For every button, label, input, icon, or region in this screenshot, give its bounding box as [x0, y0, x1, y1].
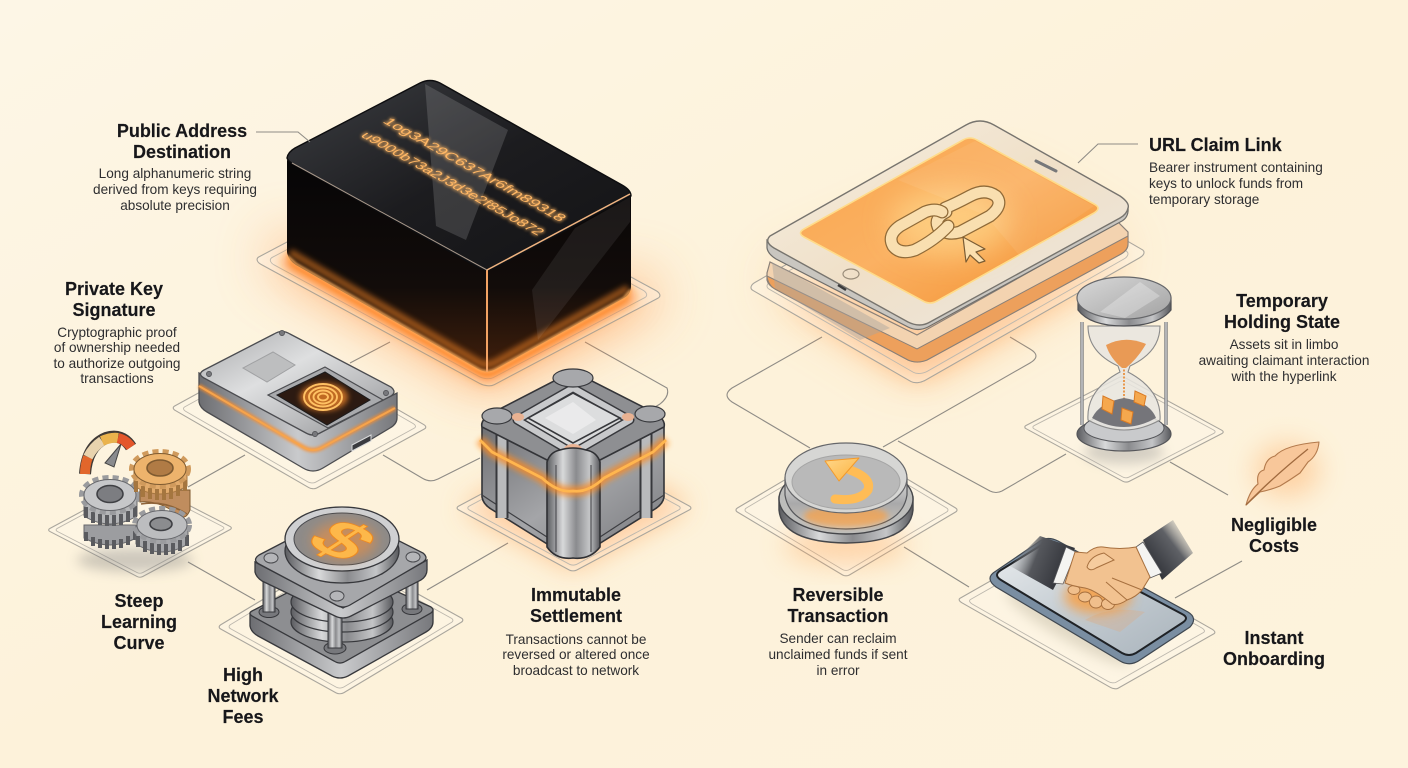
side straps	[502, 430, 646, 518]
description: Sender can reclaim	[779, 631, 897, 646]
platform	[734, 443, 959, 577]
panel: high network fees	[207, 507, 465, 727]
description: to authorize outgoing	[54, 356, 180, 371]
side faces	[482, 425, 664, 556]
glowing screen	[800, 138, 1098, 303]
orange glow under crate	[462, 450, 690, 568]
heading: Destination	[133, 142, 231, 162]
platform	[47, 480, 233, 578]
description: derived from keys requiring	[93, 182, 257, 197]
top face	[482, 372, 664, 460]
icon: stacked glass tablets	[767, 121, 1128, 362]
address text: 1og3A29C637Ar6fm89318	[379, 116, 569, 224]
panel: public address destination	[93, 80, 668, 392]
icon: hardware key with fingerprint	[199, 330, 397, 471]
description: with the hyperlink	[1230, 369, 1337, 384]
icon: armored crate	[480, 369, 666, 558]
heading: Negligible	[1231, 515, 1317, 535]
orange glow under black box	[262, 232, 668, 392]
icon: cursor	[963, 237, 985, 263]
platform	[171, 345, 428, 490]
sand	[1106, 340, 1146, 368]
bottom plate	[250, 610, 433, 678]
glass top	[785, 443, 907, 513]
screws	[206, 330, 389, 437]
description: in error	[816, 663, 860, 678]
right sleeve	[1143, 520, 1193, 580]
heading: URL Claim Link	[1149, 135, 1283, 155]
description: Assets sit in limbo	[1230, 337, 1338, 352]
icon: glass undo button	[779, 443, 913, 563]
heading: Holding State	[1224, 312, 1340, 332]
description: of ownership needed	[54, 340, 180, 355]
coin	[285, 519, 399, 583]
small panel	[243, 352, 295, 382]
heading: Costs	[1249, 536, 1299, 556]
right gray gear	[135, 509, 189, 555]
falling cubes	[1102, 391, 1146, 424]
metal ring	[779, 497, 913, 543]
inner cylinders	[291, 582, 393, 642]
heading: Transaction	[787, 606, 889, 626]
description: awaiting claimant interaction	[1199, 353, 1369, 368]
description: temporary storage	[1149, 192, 1259, 207]
heading: Fees	[222, 707, 264, 727]
heading: Temporary	[1236, 291, 1328, 311]
USB port	[352, 435, 371, 451]
panel: reversible transaction	[734, 443, 959, 678]
description: broadcast to network	[513, 663, 639, 678]
panel: immutable settlement	[455, 369, 693, 678]
front corner column	[547, 448, 600, 558]
heading: Learning	[101, 612, 177, 632]
panel: negligible costs	[1231, 442, 1319, 556]
top frame and panel	[517, 388, 630, 453]
platform	[217, 552, 465, 695]
icon: hourglass	[1077, 277, 1171, 464]
description: Long alphanumeric string	[99, 166, 251, 181]
heading: Public Address	[117, 121, 247, 141]
icon: chain link	[891, 192, 999, 252]
heading: Instant	[1244, 628, 1304, 648]
platform	[455, 444, 693, 572]
description: absolute precision	[120, 198, 230, 213]
glow	[1064, 578, 1132, 614]
orange glow under tablet	[770, 180, 1130, 380]
corner caps	[482, 369, 665, 424]
heading: Curve	[113, 633, 165, 653]
upper gray gear	[82, 478, 138, 526]
arrow	[825, 458, 869, 500]
fingerprint window	[268, 367, 383, 428]
description: Cryptographic proof	[57, 325, 177, 340]
connector lines	[188, 337, 1242, 600]
heading: Network	[207, 686, 279, 706]
icon: press with dollar coin	[250, 507, 433, 678]
heading: High	[223, 665, 263, 685]
description: keys to unlock funds from	[1149, 176, 1303, 191]
glass	[1088, 326, 1160, 430]
glass body	[785, 478, 907, 529]
icon: black box with glowing address	[287, 80, 631, 372]
base	[1077, 417, 1171, 451]
icon: gauge	[85, 437, 131, 474]
heading: Onboarding	[1223, 649, 1325, 669]
top plate	[255, 560, 427, 618]
speaker and home button details	[838, 161, 1056, 290]
panel: instant onboarding	[957, 520, 1325, 690]
glowing band	[480, 440, 666, 491]
description: transactions	[80, 371, 154, 386]
description: Transactions cannot be	[506, 632, 646, 647]
icon: phone	[990, 538, 1194, 674]
fingers	[1068, 586, 1114, 610]
dollar sign: $	[289, 509, 395, 572]
bolts	[264, 552, 420, 601]
lower gray gear	[84, 525, 136, 549]
columns	[259, 574, 422, 654]
leader line	[1078, 144, 1138, 163]
platform	[747, 155, 1148, 385]
description: reversed or altered once	[502, 647, 650, 662]
platform	[253, 167, 664, 388]
leader line	[256, 132, 310, 142]
heading: Private Key	[65, 279, 163, 299]
heading: Settlement	[530, 606, 622, 626]
panel: url claim link	[747, 121, 1323, 385]
fittings	[512, 413, 634, 454]
platform	[957, 542, 1217, 690]
lower slab	[767, 222, 1128, 362]
top cap	[1078, 298, 1171, 326]
heading: Immutable	[531, 585, 621, 605]
hands	[1065, 547, 1150, 604]
panel: steep learning curve	[47, 437, 233, 653]
rods	[1082, 322, 1166, 425]
heading: Reversible	[792, 585, 884, 605]
panel: private key signature	[54, 279, 428, 490]
left sleeve	[1010, 536, 1075, 590]
fingerprint	[304, 384, 342, 410]
heading: Signature	[72, 300, 156, 320]
icon: feather	[1246, 442, 1319, 505]
address text: u9000b73a2J3d3e2f85Jo872	[357, 130, 547, 238]
orange gear	[132, 452, 190, 517]
description: Bearer instrument containing	[1149, 160, 1323, 175]
upper slab	[767, 121, 1128, 330]
heading: Steep	[114, 591, 164, 611]
platform	[1023, 376, 1225, 483]
panel: temporary holding state	[1023, 277, 1369, 483]
icon: handshake	[1010, 520, 1193, 614]
icon: gears	[77, 452, 193, 572]
description: unclaimed funds if sent	[768, 647, 908, 662]
